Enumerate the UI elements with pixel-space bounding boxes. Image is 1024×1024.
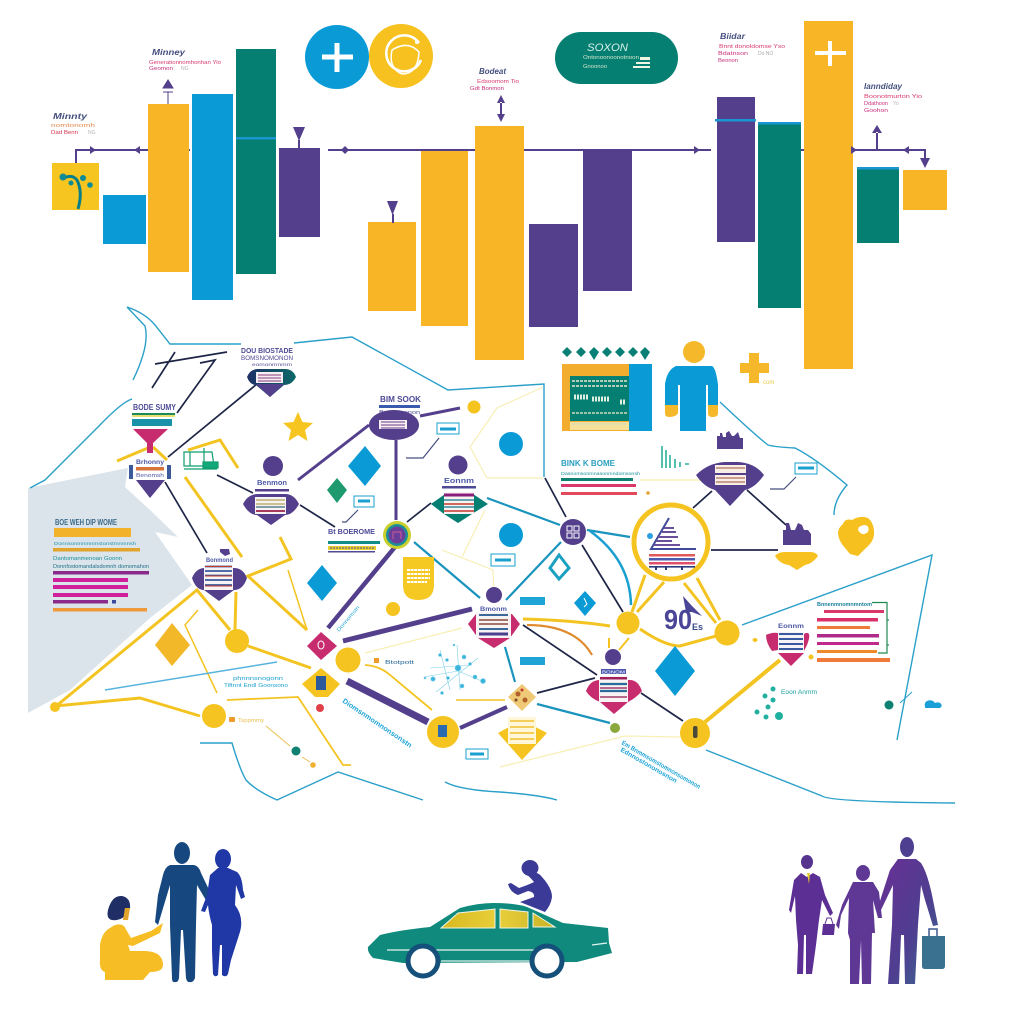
pizza tile — [508, 684, 536, 711]
annotation: fifth: Goohon — [864, 108, 888, 114]
rotated teal text lower: Em Bnmmsomstomnonsomonon — [620, 740, 701, 791]
yellow blob note — [403, 557, 434, 600]
network lines: yellow — [55, 440, 780, 765]
annotation: second: Minney — [152, 48, 186, 57]
rotated teal text lower: Ednnostononosnon — [619, 747, 678, 785]
small teal specks with label — [754, 686, 817, 720]
pill: teal label — [555, 32, 678, 84]
icon: blue person — [665, 341, 718, 431]
small blue diamonds with glyphs — [550, 555, 596, 616]
node: centre pink — [468, 587, 520, 648]
annotation: second — [149, 48, 221, 72]
network lines: teal and orange — [105, 498, 631, 733]
axis line left — [76, 150, 925, 163]
icon: yellow plus — [740, 353, 774, 386]
left text block in grey region: Donnfostomandalsdomnh domomahon — [53, 564, 149, 570]
annotation: third: Bodeat — [479, 67, 506, 76]
annotation: left: NG — [88, 130, 96, 136]
annotation: fifth: Yo — [893, 101, 899, 107]
labels around scatter: Tiftnnt Endl Goonsono — [224, 683, 288, 689]
node: right pink — [752, 624, 814, 666]
annotation: left — [51, 112, 96, 136]
text label near ring: Bt BOEROME — [328, 529, 375, 536]
annotation: fourth: Bdatnson — [718, 51, 748, 57]
hub: yellow pill circle — [680, 718, 710, 748]
row of teal diamonds — [562, 347, 650, 360]
small teal specks with label: Eoon Anmm — [781, 690, 817, 696]
annotation: fourth: Do NO — [758, 51, 773, 57]
small blue label chips — [520, 597, 545, 665]
node: person teal — [431, 456, 488, 523]
figures: standing woman — [201, 849, 245, 976]
node: purple triangle — [129, 459, 171, 498]
small blue circles — [499, 432, 523, 547]
left text block in grey region: Donnsonmnmnmstonstmnmnsh — [54, 541, 137, 546]
left text block in grey region: BOE WEH DIP WOME — [55, 518, 117, 527]
yellow hub circles — [50, 400, 740, 728]
annotation: left: Dad Benn — [51, 130, 78, 136]
figures: family with luggage — [789, 837, 945, 984]
annotation: third — [470, 67, 519, 92]
mini bar spark — [662, 446, 689, 468]
small dots and dashes — [266, 692, 942, 768]
hub: yellow icon circle — [427, 716, 459, 748]
annotation: fourth: Biidar — [720, 32, 746, 41]
node: funnel — [132, 403, 177, 453]
diamonds — [155, 412, 695, 696]
node: left lower — [192, 549, 247, 601]
large 90 figure: Es — [692, 622, 703, 632]
panel: top bar chart — [52, 21, 947, 369]
large 90 figure: 90 — [664, 604, 692, 635]
annotation: second: NG — [181, 66, 189, 72]
node: purple triangle: Benomsh — [136, 473, 164, 479]
node: left lower: Bonmond — [206, 557, 233, 564]
labels around scatter — [224, 658, 415, 724]
icon: yellow plus: com — [763, 380, 774, 386]
icon: yellow cog blob — [838, 517, 874, 556]
bars: middle group — [368, 126, 632, 360]
node: funnel: BODE SUMY — [133, 403, 177, 412]
node: right pink: Eonnm — [778, 624, 804, 630]
scatter: blue network cluster — [424, 644, 486, 694]
left text block in grey region — [53, 518, 149, 612]
figures: standing man — [155, 842, 212, 982]
text block right with node: Bnnenmnomnmntom — [817, 602, 873, 608]
annotation: fourth: Beonon — [718, 58, 738, 64]
annotation: third: Edsoomom Tio — [477, 79, 519, 85]
rotated text upper: Donnomstn — [336, 605, 361, 633]
node: purple circle hub — [560, 519, 586, 545]
annotation: third: Gdt Bonmon — [470, 86, 504, 92]
pill: teal label: Gnoonoo — [583, 64, 607, 70]
node: top left: BOMSNOMONON — [241, 356, 293, 362]
bars: right group — [715, 21, 947, 369]
text block right with node — [817, 602, 890, 662]
node: top centre oval: Bnmemonon — [379, 410, 420, 416]
node: lower pink — [586, 649, 642, 714]
annotation: fourth: Bnnt donoldomse Yso — [719, 44, 785, 50]
annotation: left: nomtonomh — [51, 123, 95, 129]
large 90 figure — [664, 596, 703, 635]
pill: teal label: SOXON — [587, 42, 628, 54]
text block upper centre: BINK K BOME — [561, 459, 616, 468]
node: top centre oval — [369, 395, 421, 440]
annotation: left: Minnty — [53, 112, 88, 121]
node: person teal: Eonnm — [444, 478, 474, 485]
node: person purple: Benmon — [257, 480, 287, 487]
labels around scatter: Tsppmmy — [238, 718, 265, 724]
labels around scatter: Btotpott — [385, 660, 415, 666]
big yellow ring with pyramid — [634, 505, 708, 579]
icon: yellow ring circle — [369, 24, 433, 88]
node: purple triangle: Brhonny — [136, 459, 164, 466]
icon: blue plus circle — [305, 25, 369, 89]
annotation: fifth: Ddathoon — [864, 101, 888, 107]
node: top centre oval: BIM SOOK — [380, 395, 421, 404]
annotation: fourth — [718, 32, 785, 64]
text label near ring — [328, 529, 380, 552]
node: upper right purple — [696, 431, 764, 506]
node: central ring — [383, 521, 411, 549]
node: top left: eomonmnmm — [252, 362, 292, 367]
annotation: second: Generationnomhonhan Yio — [149, 60, 221, 66]
node: centre pink: Bmonm — [480, 607, 507, 613]
network lines: dark — [152, 352, 796, 721]
node: lower pink: BONOM — [602, 670, 625, 674]
yellow diamond card — [498, 717, 547, 760]
node: top left — [241, 348, 296, 397]
pill: teal label: Ontonoonoonotnoon — [583, 55, 639, 61]
text block upper centre: Dasnomsonmnasonmndomsonsh — [561, 471, 641, 476]
node: person purple — [243, 456, 299, 525]
left text block in grey region: Dantomanmenoan Goonn — [53, 556, 122, 562]
map outline: blue contour lines — [30, 307, 955, 803]
panel: teal card with person — [562, 364, 652, 431]
rotated teal text: Diomsnmomnonsonstn — [341, 698, 413, 750]
icon: yellow leaf tile — [52, 163, 99, 210]
yellow diamond with icon — [302, 668, 340, 697]
icon: green table chart — [184, 448, 218, 469]
figures: car with reader — [368, 860, 612, 976]
annotation: fifth — [864, 82, 922, 114]
pink diamond — [307, 632, 337, 660]
labels around scatter: phnnnsnogonn — [233, 676, 283, 682]
node: right yellow — [775, 523, 818, 570]
network lines: purple — [298, 408, 507, 728]
text block upper centre — [561, 459, 650, 495]
annotation: second: Geomon — [149, 66, 173, 72]
node: top left: DOU BIOSTADE — [241, 348, 293, 355]
bars: left group — [103, 49, 320, 300]
figures: kneeling woman — [100, 896, 163, 980]
annotation: fifth: Ianndiday — [864, 82, 903, 91]
annotation: fifth: Boonotmurton Yio — [864, 94, 922, 100]
arrows on axis — [90, 80, 930, 223]
map region: grey shaded area — [28, 468, 192, 713]
mini table icons — [354, 423, 817, 759]
thin cream connectors — [365, 387, 712, 767]
